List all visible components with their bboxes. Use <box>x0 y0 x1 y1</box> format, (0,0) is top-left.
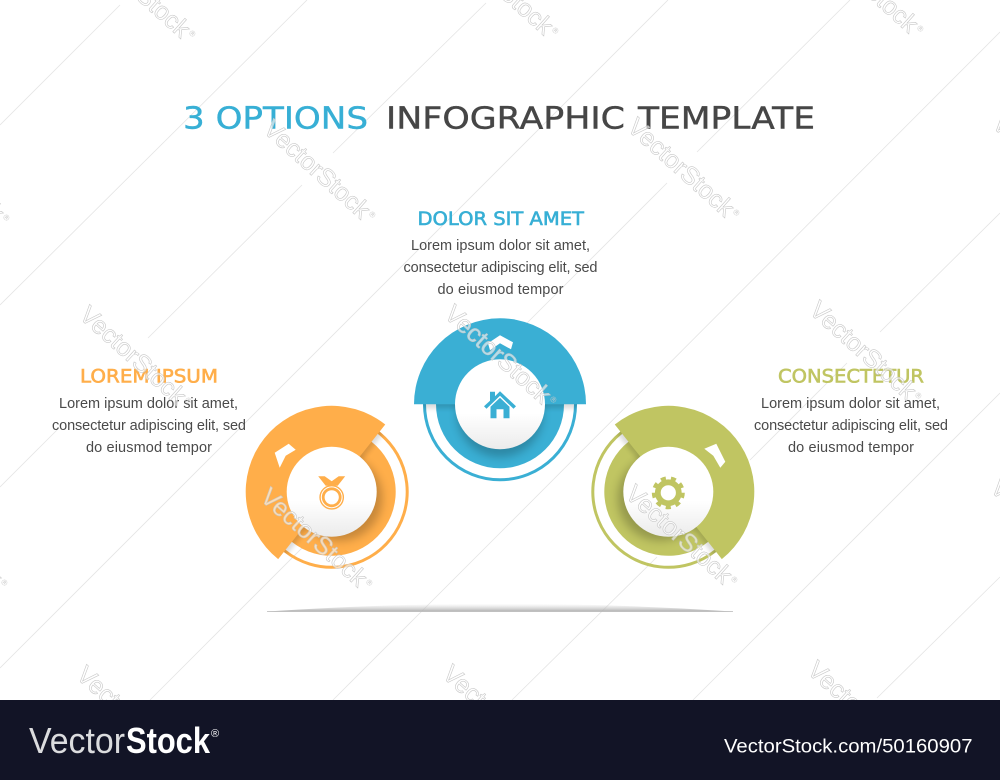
watermarks: ® <box>550 25 560 36</box>
panel: dolor sit amet text: do eiusmod tempor <box>438 282 564 298</box>
watermarks: VectorStock <box>620 480 738 590</box>
title: 3 OPTIONS <box>183 102 368 136</box>
watermarks: VectorStock <box>437 660 555 770</box>
panel: dolor sit amet text: consectetur adipiscing elit, sed <box>404 260 598 276</box>
watermarks: ® <box>364 577 374 588</box>
panel: lorem ipsum text <box>52 366 246 456</box>
panel: consectetur text: Lorem ipsum dolor sit amet, <box>761 396 940 412</box>
title: TEMPLATE <box>637 102 815 136</box>
watermarks: ® <box>1 212 11 223</box>
panel: lorem ipsum text: LOREM IPSUM <box>80 366 218 388</box>
title <box>183 102 815 136</box>
panel: consectetur text: consectetur adipiscing elit, sed <box>754 418 948 434</box>
watermarks: ® <box>367 209 377 220</box>
watermarks: VectorStock <box>439 300 557 410</box>
panel: lorem ipsum text: do eiusmod tempor <box>86 440 212 456</box>
icon: green chevron <box>704 444 725 468</box>
footer image id: VectorStock.com/50160907 <box>724 737 972 758</box>
panel: lorem ipsum text: Lorem ipsum dolor sit amet, <box>59 396 238 412</box>
icon: house <box>484 391 516 418</box>
watermarks: ® <box>915 23 925 34</box>
icon: gear <box>654 478 683 507</box>
watermarks: VectorStock <box>74 301 192 411</box>
icon: blue chevron <box>488 335 513 350</box>
panel: consectetur text <box>754 366 948 456</box>
watermarks: ® <box>729 574 739 585</box>
panel: consectetur text: do eiusmod tempor <box>788 440 914 456</box>
watermarks: ® <box>731 207 741 218</box>
footer logo: ® <box>211 728 219 740</box>
watermarks: VectorStock <box>804 296 922 406</box>
watermarks: VectorStock <box>255 483 373 593</box>
option: green circle <box>591 406 754 569</box>
watermarks: VectorStock <box>622 113 740 223</box>
ground shadow <box>267 604 733 612</box>
footer bar <box>0 700 1000 780</box>
panel: dolor sit amet text <box>404 209 598 298</box>
panel: consectetur text: CONSECTETUR <box>778 366 924 388</box>
icon: orange chevron <box>275 444 296 468</box>
watermarks: ® <box>183 395 193 406</box>
footer logo: Vector <box>29 720 125 761</box>
footer logo: Stock <box>126 720 211 761</box>
watermarks: VectorStock <box>258 115 376 225</box>
watermarks: ® <box>548 394 558 405</box>
footer logo <box>29 720 219 761</box>
panel: dolor sit amet text: Lorem ipsum dolor sit amet, <box>411 238 590 254</box>
icon: medal <box>318 476 345 509</box>
watermarks: VectorStock <box>71 661 189 771</box>
title: INFOGRAPHIC <box>386 102 625 136</box>
watermarks: ® <box>187 28 197 39</box>
panel: lorem ipsum text: consectetur adipiscing elit, sed <box>52 418 246 434</box>
watermarks: VectorStock <box>802 656 920 766</box>
panel: dolor sit amet text: DOLOR SIT AMET <box>418 209 585 230</box>
option: orange circle <box>246 406 409 569</box>
watermarks: ® <box>913 390 923 401</box>
option: blue circle <box>414 318 586 480</box>
